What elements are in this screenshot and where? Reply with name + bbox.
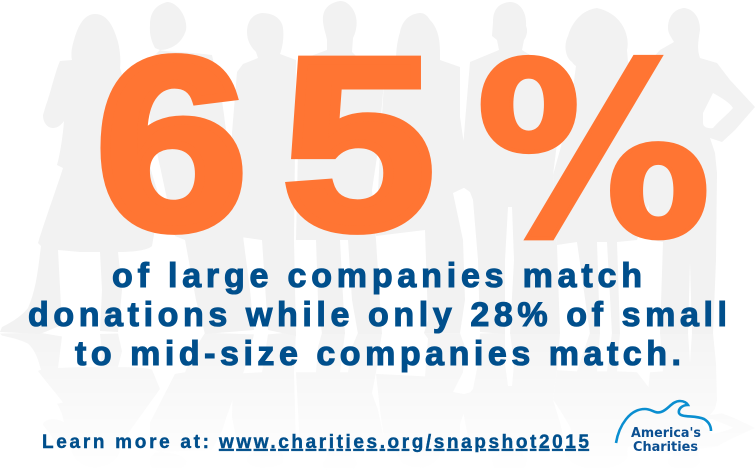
learn more link: www.charities.org/snapshot2015 bbox=[218, 432, 589, 453]
logo wordmark: Charities bbox=[633, 440, 698, 455]
silhouettes: floor reflection bbox=[0, 333, 716, 374]
headline: 65%: 5 bbox=[282, 7, 434, 280]
headline: 65%: % bbox=[475, 12, 712, 292]
icon: eagle arc bbox=[616, 401, 711, 443]
statement text bbox=[28, 257, 727, 373]
silhouettes: group of business people bbox=[0, 1, 755, 336]
logo wordmark: America's bbox=[631, 426, 701, 441]
learn more link bbox=[42, 432, 589, 453]
headline: 65%: 6 bbox=[96, 7, 247, 280]
headline: 65% bbox=[96, 7, 712, 292]
statement text: to mid-size companies match. bbox=[75, 335, 681, 373]
statement text: of large companies match bbox=[112, 257, 642, 295]
learn more link: Learn more at: bbox=[42, 432, 209, 453]
logo wordmark bbox=[631, 426, 701, 455]
statement text: donations while only 28% of small bbox=[28, 296, 727, 334]
logo: America's Charities bbox=[616, 401, 711, 455]
